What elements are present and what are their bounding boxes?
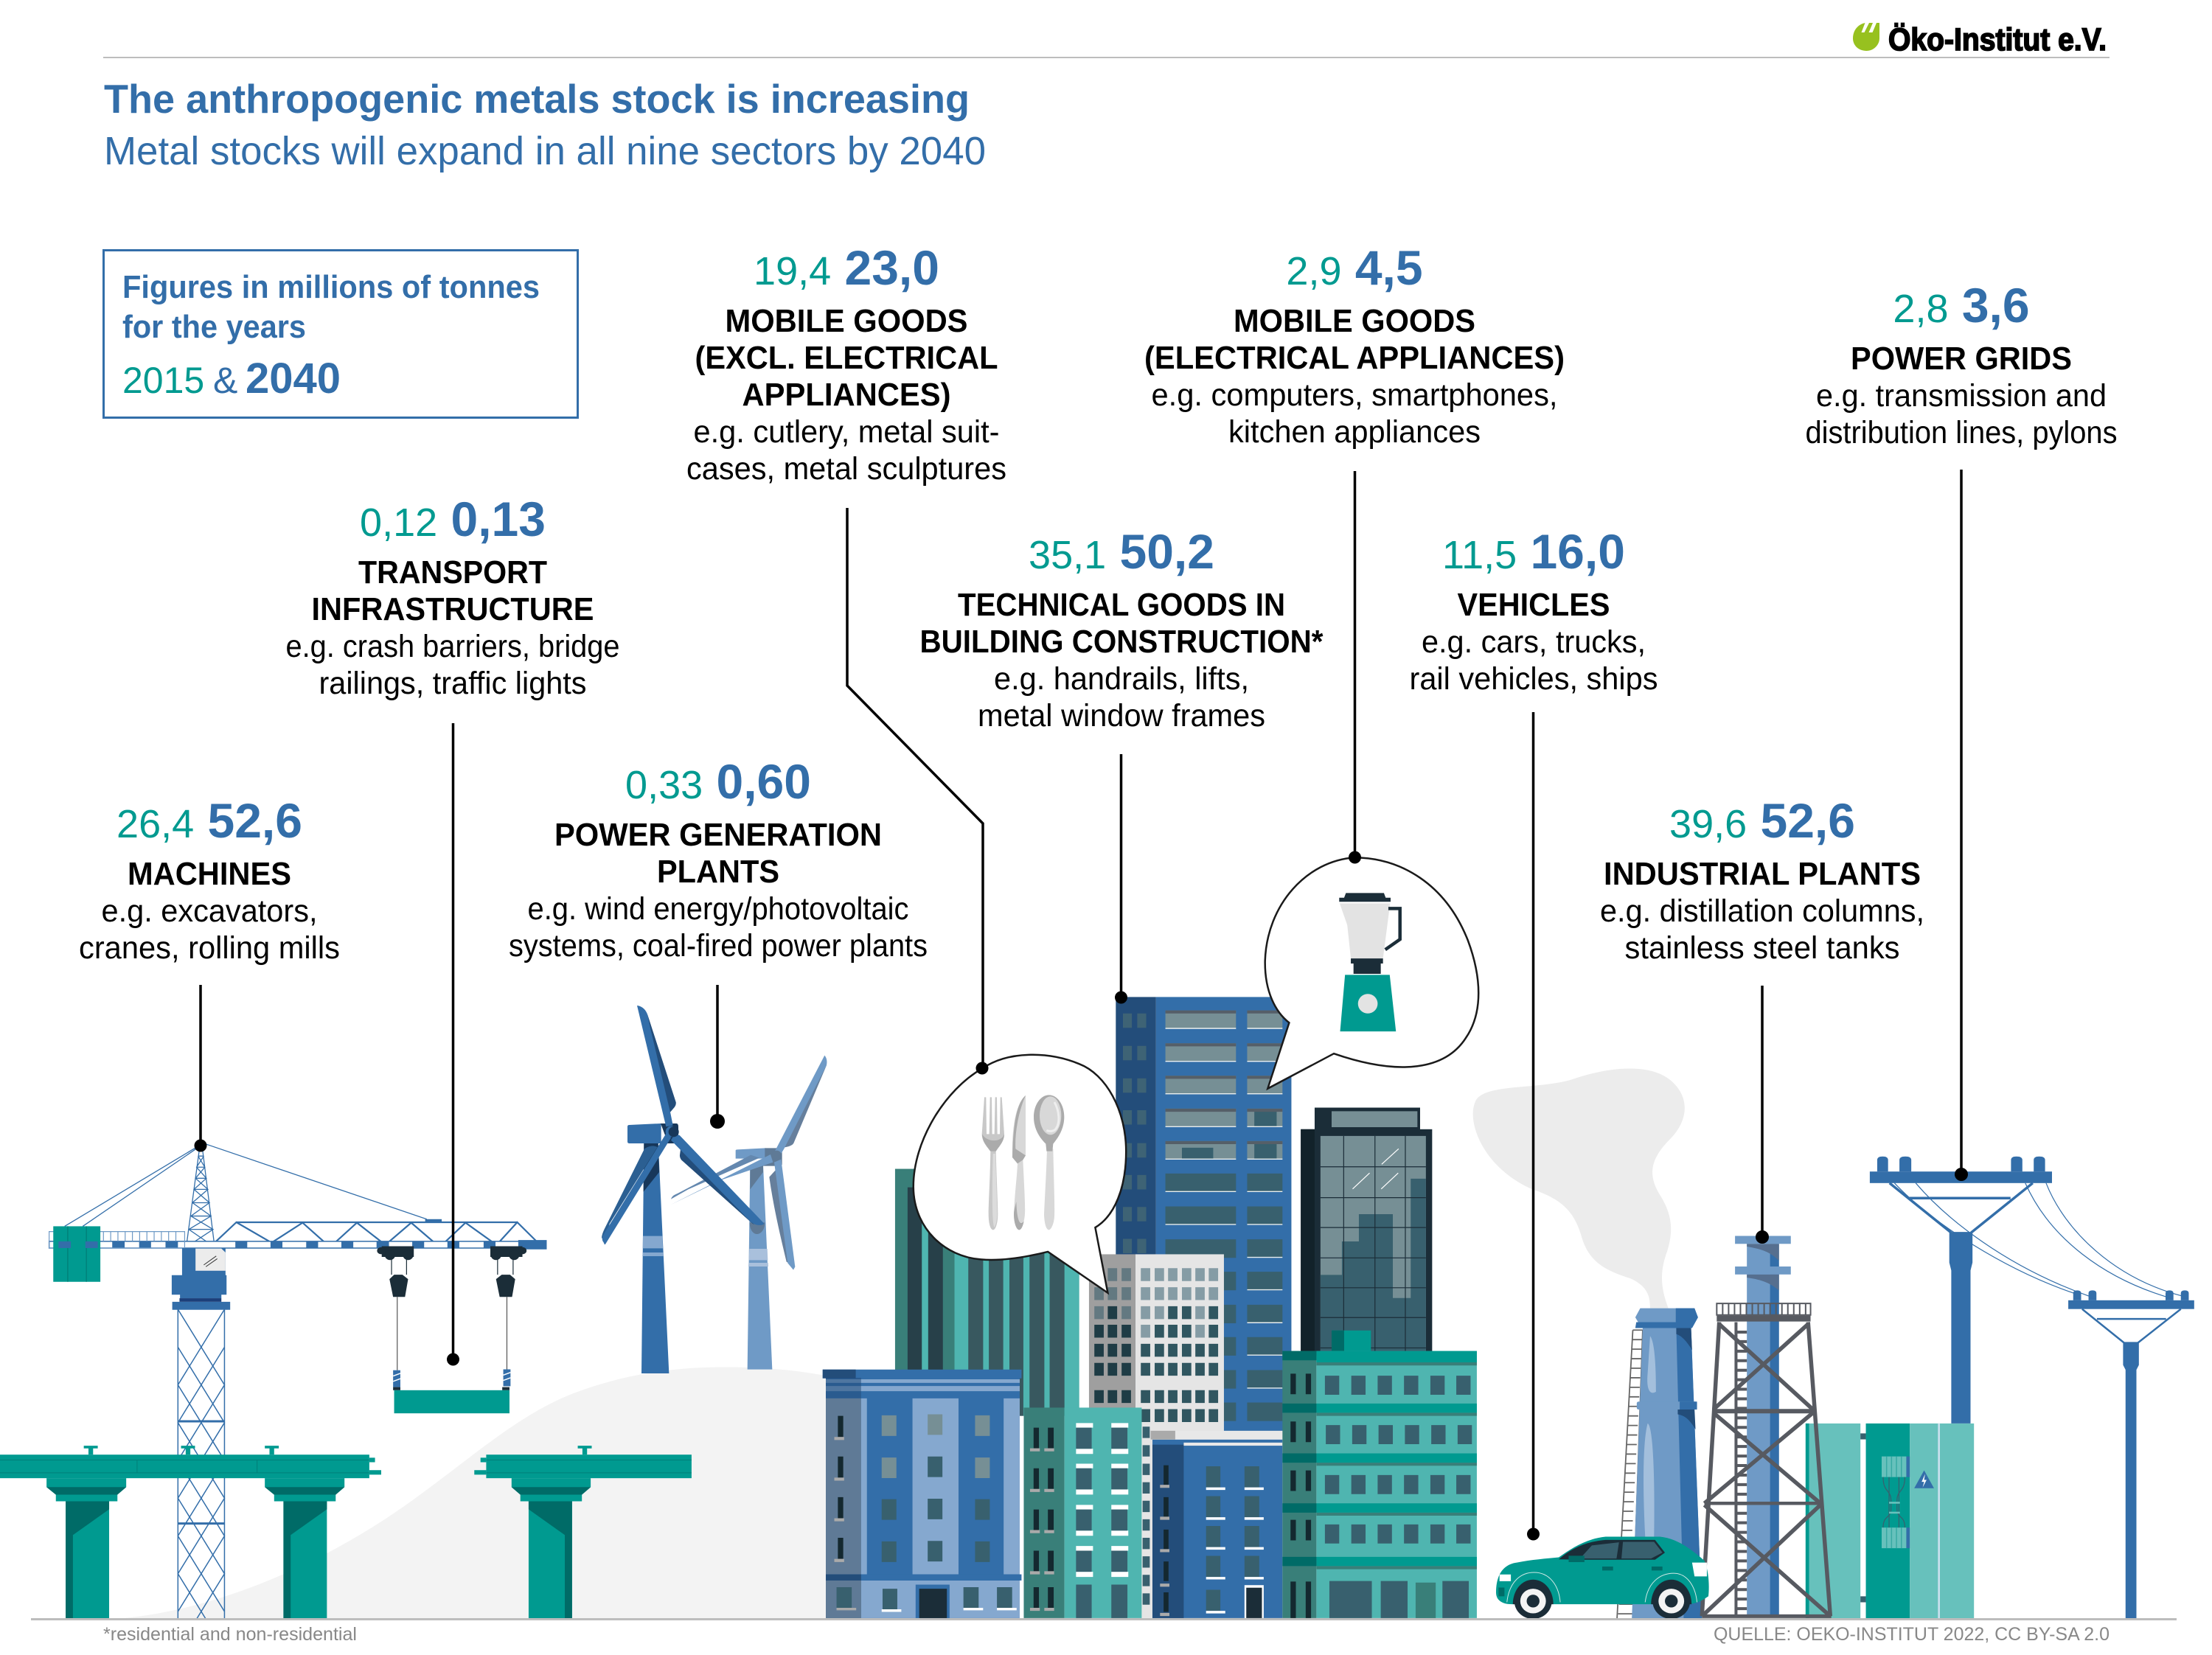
subtitle: Metal stocks will expand in all nine sectors by 2040 xyxy=(104,129,986,173)
leader line: power generation plants xyxy=(710,985,725,1129)
smoke xyxy=(1473,1069,1685,1309)
label: machines xyxy=(79,793,340,966)
grey and white building xyxy=(1089,1254,1224,1435)
label: mobile goods excl. electrical appliances: MOBILE GOODS xyxy=(726,303,967,339)
legend box: 2015 xyxy=(122,360,204,401)
label: transport infrastructure xyxy=(286,492,619,701)
label: vehicles: VEHICLES xyxy=(1457,587,1610,623)
legend box xyxy=(103,251,578,417)
label: industrial plants xyxy=(1600,793,1924,966)
front dark blue building xyxy=(1151,1431,1284,1618)
crane railing xyxy=(49,1232,184,1248)
bridge pier 1 xyxy=(46,1478,126,1619)
label: power generation plants: e.g. wind energy/photovoltaic xyxy=(528,891,908,927)
crane hooks xyxy=(377,1247,526,1370)
label: mobile goods electrical appliances: MOBILE GOODS xyxy=(1234,303,1475,339)
label: technical goods in building construction: e.g. handrails, lifts, xyxy=(994,661,1249,697)
steel tower frame xyxy=(1702,1303,1832,1616)
label: power grids: e.g. transmission and xyxy=(1816,378,2107,414)
steel tower inner column xyxy=(1735,1236,1791,1616)
label: mobile goods excl. electrical appliances xyxy=(686,240,1006,487)
label: transport infrastructure: railings, traffic lights xyxy=(319,666,587,701)
steel tower stairs xyxy=(1736,1322,1747,1616)
label: power grids xyxy=(1805,278,2118,450)
light wind turbine xyxy=(670,1056,827,1370)
icon: fork xyxy=(982,1097,1004,1230)
label: transport infrastructure: INFRASTRUCTURE xyxy=(311,591,594,627)
utility pole 1 xyxy=(1870,1157,2052,1424)
striped green tower xyxy=(895,1169,1079,1416)
label: industrial plants: 39,6 52,6 xyxy=(1669,793,1855,848)
label: industrial plants: stainless steel tanks xyxy=(1625,930,1899,966)
label: power generation plants: PLANTS xyxy=(657,854,779,890)
label: mobile goods electrical appliances: e.g. computers, smartphones, xyxy=(1152,377,1557,413)
crane cab xyxy=(172,1248,230,1310)
footnote: *residential and non-residential xyxy=(103,1624,357,1645)
leader line: vehicles xyxy=(1527,712,1540,1541)
icon: cutlery xyxy=(982,1095,1064,1230)
label: technical goods in building construction xyxy=(920,524,1324,734)
logo: Öko-Institut e.V.: Öko-Institut e.V. xyxy=(1888,22,2107,58)
power cables xyxy=(1894,1183,2183,1297)
label: vehicles: 11,5 16,0 xyxy=(1442,524,1625,579)
chimney ladder xyxy=(1617,1330,1643,1619)
label: vehicles: e.g. cars, trucks, xyxy=(1422,624,1646,660)
icon: spoon xyxy=(1034,1095,1064,1230)
label: mobile goods excl. electrical appliances: (EXCL. ELECTRICAL xyxy=(695,340,998,376)
label: transport infrastructure: e.g. crash barriers, bridge xyxy=(286,629,619,664)
label: machines: e.g. excavators, xyxy=(102,893,317,929)
top rule xyxy=(103,57,2110,58)
label: industrial plants: e.g. distillation columns, xyxy=(1600,893,1924,929)
dark wind turbine xyxy=(602,1006,765,1373)
icon: warning sign xyxy=(1914,1471,1934,1488)
narrow window strip xyxy=(1141,1426,1152,1618)
crane counterweight xyxy=(53,1226,100,1282)
label: technical goods in building construction: metal window frames xyxy=(978,698,1265,734)
bridge deck right xyxy=(474,1446,692,1478)
legend box: & xyxy=(213,360,237,401)
illustration: city buildings xyxy=(823,857,1478,1618)
label: technical goods in building construction: 35,1 50,2 xyxy=(1029,524,1214,579)
illustration: industry, car and power lines xyxy=(1473,1069,2194,1619)
icon: blender xyxy=(1339,893,1400,1031)
label: power grids: POWER GRIDS xyxy=(1851,341,2072,377)
blue high-rise xyxy=(1116,997,1291,1435)
label: power grids: distribution lines, pylons xyxy=(1805,415,2118,450)
bridge pier 2 xyxy=(265,1478,344,1619)
label: mobile goods electrical appliances: (ELECTRICAL APPLIANCES) xyxy=(1144,340,1565,376)
leader line: power grids xyxy=(1955,470,1968,1181)
crane tower lattice xyxy=(178,1309,224,1619)
label: mobile goods excl. electrical appliances: APPLIANCES) xyxy=(742,377,951,413)
teal mid building xyxy=(1023,1407,1141,1618)
label: mobile goods excl. electrical appliances: e.g. cutlery, metal suit- xyxy=(693,414,1000,450)
illustration: tower crane xyxy=(49,1144,546,1619)
crane load: bridge segment xyxy=(393,1369,510,1413)
label: transport infrastructure: 0,12 0,13 xyxy=(360,492,546,546)
label: power generation plants: POWER GENERATION xyxy=(554,817,882,853)
legend box: for the years xyxy=(122,309,306,345)
crane jib truss xyxy=(215,1222,538,1247)
illustration: bridge xyxy=(0,1446,692,1619)
label: mobile goods excl. electrical appliances: 19,4 23,0 xyxy=(754,240,939,295)
bridge deck left xyxy=(0,1446,381,1478)
leader line: mobile goods excl. electrical xyxy=(847,508,988,1075)
icon: car xyxy=(1496,1537,1709,1619)
label: power generation plants: 0,33 0,60 xyxy=(625,754,811,809)
label: mobile goods excl. electrical appliances: cases, metal sculptures xyxy=(686,451,1006,487)
substation xyxy=(1806,1424,1974,1619)
label: industrial plants: INDUSTRIAL PLANTS xyxy=(1604,856,1921,892)
speech bubble: cutlery xyxy=(914,1055,1126,1293)
label: technical goods in building construction: BUILDING CONSTRUCTION* xyxy=(920,624,1324,660)
label: technical goods in building construction: TECHNICAL GOODS IN xyxy=(958,587,1285,623)
illustration: wind turbines xyxy=(602,1006,827,1373)
right teal building xyxy=(1282,1331,1477,1618)
label: machines: 26,4 52,6 xyxy=(116,793,302,848)
legend box: 2040 xyxy=(246,355,341,403)
title: The anthropogenic metals stock is increasing xyxy=(104,76,970,122)
label: power grids: 2,8 3,6 xyxy=(1893,278,2030,332)
front blue building xyxy=(823,1370,1021,1618)
leader line: machines xyxy=(195,985,206,1151)
label: mobile goods electrical appliances: kitchen appliances xyxy=(1228,414,1481,450)
label: power generation plants xyxy=(509,754,928,964)
source: QUELLE: OEKO-INSTITUT 2022, CC BY-SA 2.0 xyxy=(1714,1624,2110,1645)
icon: knife xyxy=(1012,1095,1026,1230)
label: machines: cranes, rolling mills xyxy=(79,930,340,966)
crane mast xyxy=(65,1144,427,1247)
leader line: mobile goods electrical xyxy=(1349,471,1361,864)
label: transport infrastructure: TRANSPORT xyxy=(358,554,547,590)
speech bubble: blender xyxy=(1265,857,1478,1089)
leader line: technical goods xyxy=(1115,754,1127,1004)
label: mobile goods electrical appliances: 2,9 4,5 xyxy=(1286,240,1423,295)
label: power generation plants: systems, coal-fired power plants xyxy=(509,928,928,964)
label: vehicles xyxy=(1410,524,1658,697)
label: vehicles: rail vehicles, ships xyxy=(1410,661,1658,697)
illustration: hill background xyxy=(114,1367,848,1619)
dark glass tower xyxy=(1301,1107,1432,1356)
legend box: Figures in millions of tonnes xyxy=(122,269,540,305)
ground line xyxy=(31,1618,2177,1620)
leader line: industrial plants xyxy=(1756,986,1769,1244)
bridge pier 3 xyxy=(512,1478,591,1619)
leader line: transport infrastructure xyxy=(447,723,459,1365)
label: machines: MACHINES xyxy=(128,856,291,892)
utility pole 2 xyxy=(2068,1290,2194,1619)
chimney xyxy=(1632,1309,1702,1619)
label: mobile goods electrical appliances xyxy=(1144,240,1565,450)
